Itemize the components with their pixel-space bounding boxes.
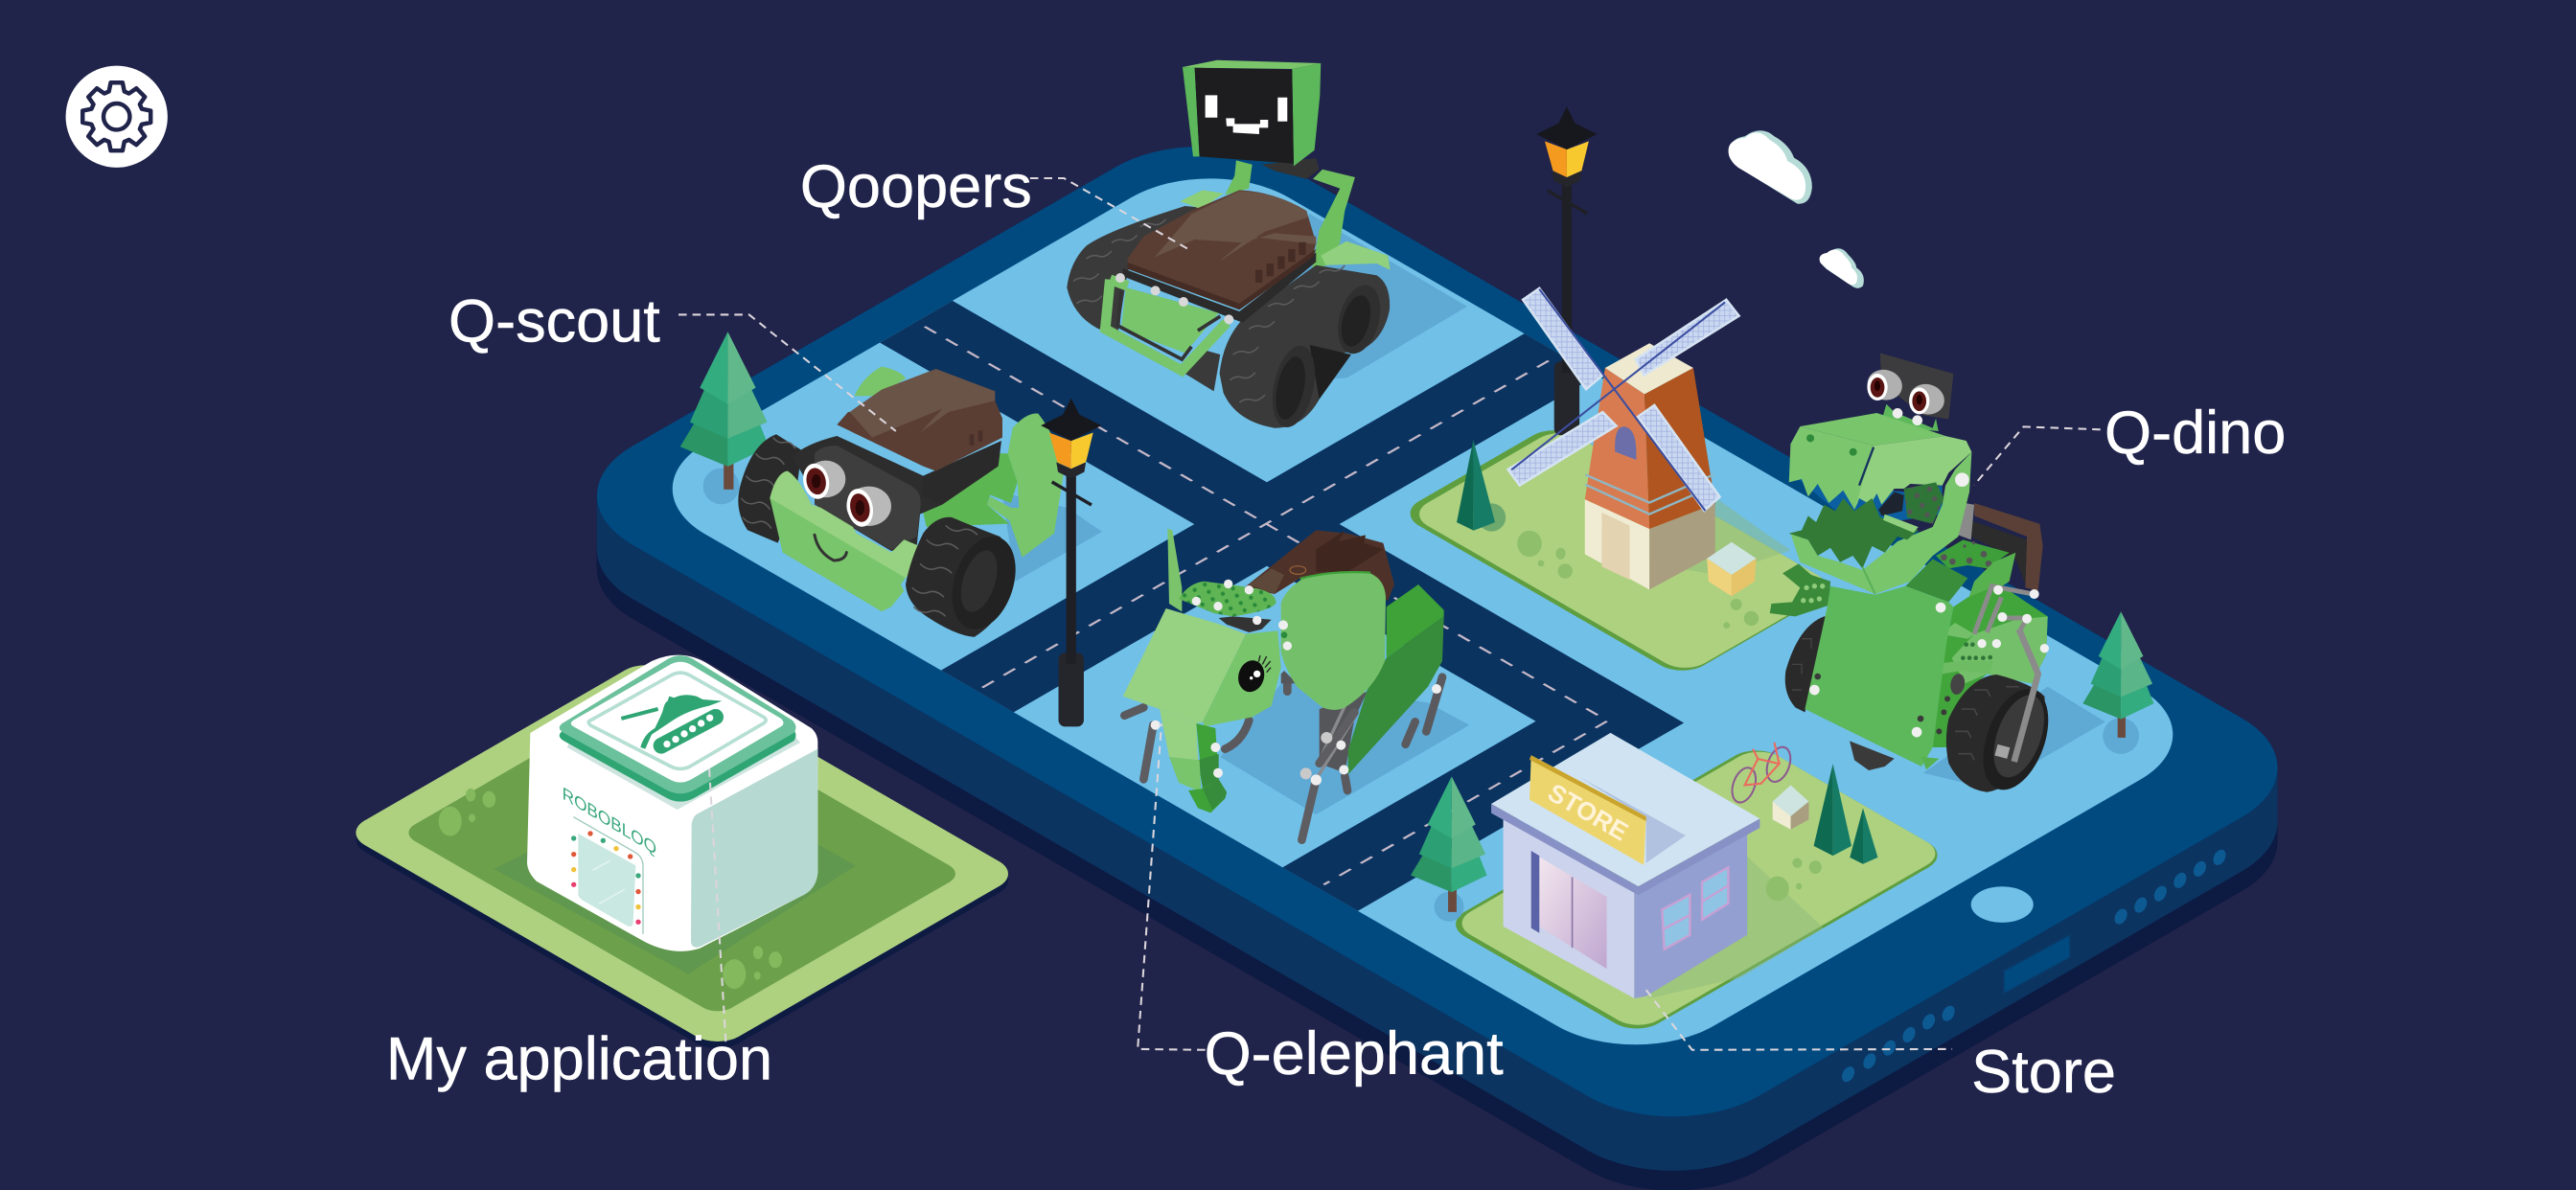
leader: Q-elephant	[1138, 723, 1206, 1050]
label: Q-scout: Q-scout	[448, 288, 660, 355]
robot: Q-dino	[1770, 353, 2060, 799]
charging port	[2004, 934, 2070, 994]
leader: Store	[1646, 990, 1952, 1050]
label: Store: Store	[1971, 1039, 2116, 1106]
elephant head	[1123, 608, 1246, 723]
dino jaw strip	[1920, 452, 1971, 556]
store tile trees and details	[1766, 764, 1877, 901]
Q-scout eyes	[800, 461, 891, 529]
Q-scout face plate	[770, 471, 923, 611]
lamp post: left	[1041, 399, 1101, 726]
my application box	[527, 655, 817, 951]
dino brown back and display	[1974, 503, 2043, 591]
store building: STORE	[1543, 778, 1633, 846]
elephant trunk	[1196, 723, 1219, 789]
elephant ear	[1281, 572, 1386, 710]
Q-scout body	[793, 436, 942, 551]
store building	[1491, 733, 1760, 998]
Qoopers front plate	[1321, 241, 1391, 270]
my application tile	[343, 658, 1021, 1055]
leader: Qoopers	[1030, 178, 1189, 250]
elephant brown shell	[1244, 530, 1394, 601]
dino screws	[1809, 472, 2049, 737]
elephant front legs	[1143, 712, 1354, 840]
windmill tile spots	[1517, 531, 1759, 629]
Qoopers brown shell	[1128, 190, 1316, 309]
phone body	[547, 118, 2328, 1190]
roof	[1491, 804, 1760, 895]
windmill	[1508, 288, 1739, 589]
dino upper head	[1789, 413, 1971, 510]
leader: Q-scout	[678, 314, 896, 431]
dino mouth interior	[1799, 479, 1943, 524]
robot: Qoopers	[1067, 60, 1391, 431]
label: My application: My application	[386, 1025, 772, 1092]
dino metal arm	[1974, 586, 2038, 762]
windmill lamp post	[1536, 106, 1597, 435]
tank icon	[621, 695, 722, 749]
speaker dots	[1839, 848, 2228, 1084]
Q-scout brown shell	[837, 400, 1002, 471]
bicycle	[1728, 743, 1795, 806]
elephant screws	[1151, 580, 1441, 786]
settings gear icon	[66, 66, 168, 168]
Qoopers monitor	[1183, 60, 1321, 166]
Q-scout left wheel	[738, 434, 802, 543]
dino neck plates	[1936, 539, 2010, 568]
elephant frame	[1320, 692, 1368, 773]
brand text: ROBOBLOQ	[563, 784, 656, 859]
Qoopers under chassis	[1123, 252, 1316, 323]
label: Qoopers: Qoopers	[800, 153, 1032, 220]
cap	[560, 655, 800, 810]
dino foot	[1850, 741, 1895, 770]
ground shadows	[1002, 214, 2105, 814]
windows	[1662, 867, 1728, 950]
Qoopers joint	[1262, 158, 1320, 179]
tower	[1585, 368, 1649, 529]
elephant body	[1387, 584, 1444, 658]
label: Q-elephant: Q-elephant	[1205, 1020, 1504, 1087]
Q-scout right wheel	[906, 517, 1014, 637]
label: Q-dino: Q-dino	[2104, 400, 2286, 467]
elephant head shadow part	[1219, 616, 1272, 632]
dino body side	[1933, 584, 2048, 747]
sign	[1530, 755, 1646, 865]
elephant eye	[1234, 655, 1271, 695]
Qoopers front panel	[1185, 348, 1220, 391]
dino lower jaw	[1789, 498, 1958, 594]
Q-scout right green assembly	[923, 453, 1018, 527]
leader: My application	[709, 768, 726, 1047]
tree: by store	[1411, 776, 1487, 922]
tree cone: windmill tile	[1457, 440, 1506, 532]
cloud: large	[1729, 130, 1812, 204]
dino claw	[1770, 563, 1830, 616]
cloud: small	[1820, 248, 1864, 288]
phone screen with roads	[627, 152, 2219, 1071]
small crate	[1707, 542, 1757, 596]
robot: Q-elephant	[1123, 529, 1444, 840]
tree: right	[2082, 611, 2153, 754]
door	[1539, 857, 1607, 969]
tile shadows	[1647, 492, 1824, 998]
dino body front	[1805, 586, 1953, 767]
blades	[1508, 288, 1739, 511]
Q-scout back flap	[855, 367, 906, 396]
dino perforated plate	[1904, 482, 1944, 524]
Qoopers arms	[1225, 160, 1355, 268]
home button	[1971, 886, 2034, 923]
robot: Q-scout	[738, 367, 1064, 637]
elephant back legs	[1124, 677, 1442, 790]
Qoopers rear plate	[1181, 190, 1224, 209]
elephant antenna	[1167, 529, 1182, 611]
tree: upper left	[680, 332, 769, 504]
Qoopers right tracks	[1220, 265, 1390, 428]
Qoopers back track	[1067, 206, 1201, 332]
base	[1585, 499, 1649, 589]
dino left wheel	[1785, 616, 1828, 712]
leader: Q-dino	[1974, 426, 2101, 486]
dino right wheel	[1946, 675, 2045, 792]
dino sensor	[1864, 353, 1953, 431]
elephant plate	[1179, 582, 1276, 616]
window with lights	[571, 817, 643, 934]
